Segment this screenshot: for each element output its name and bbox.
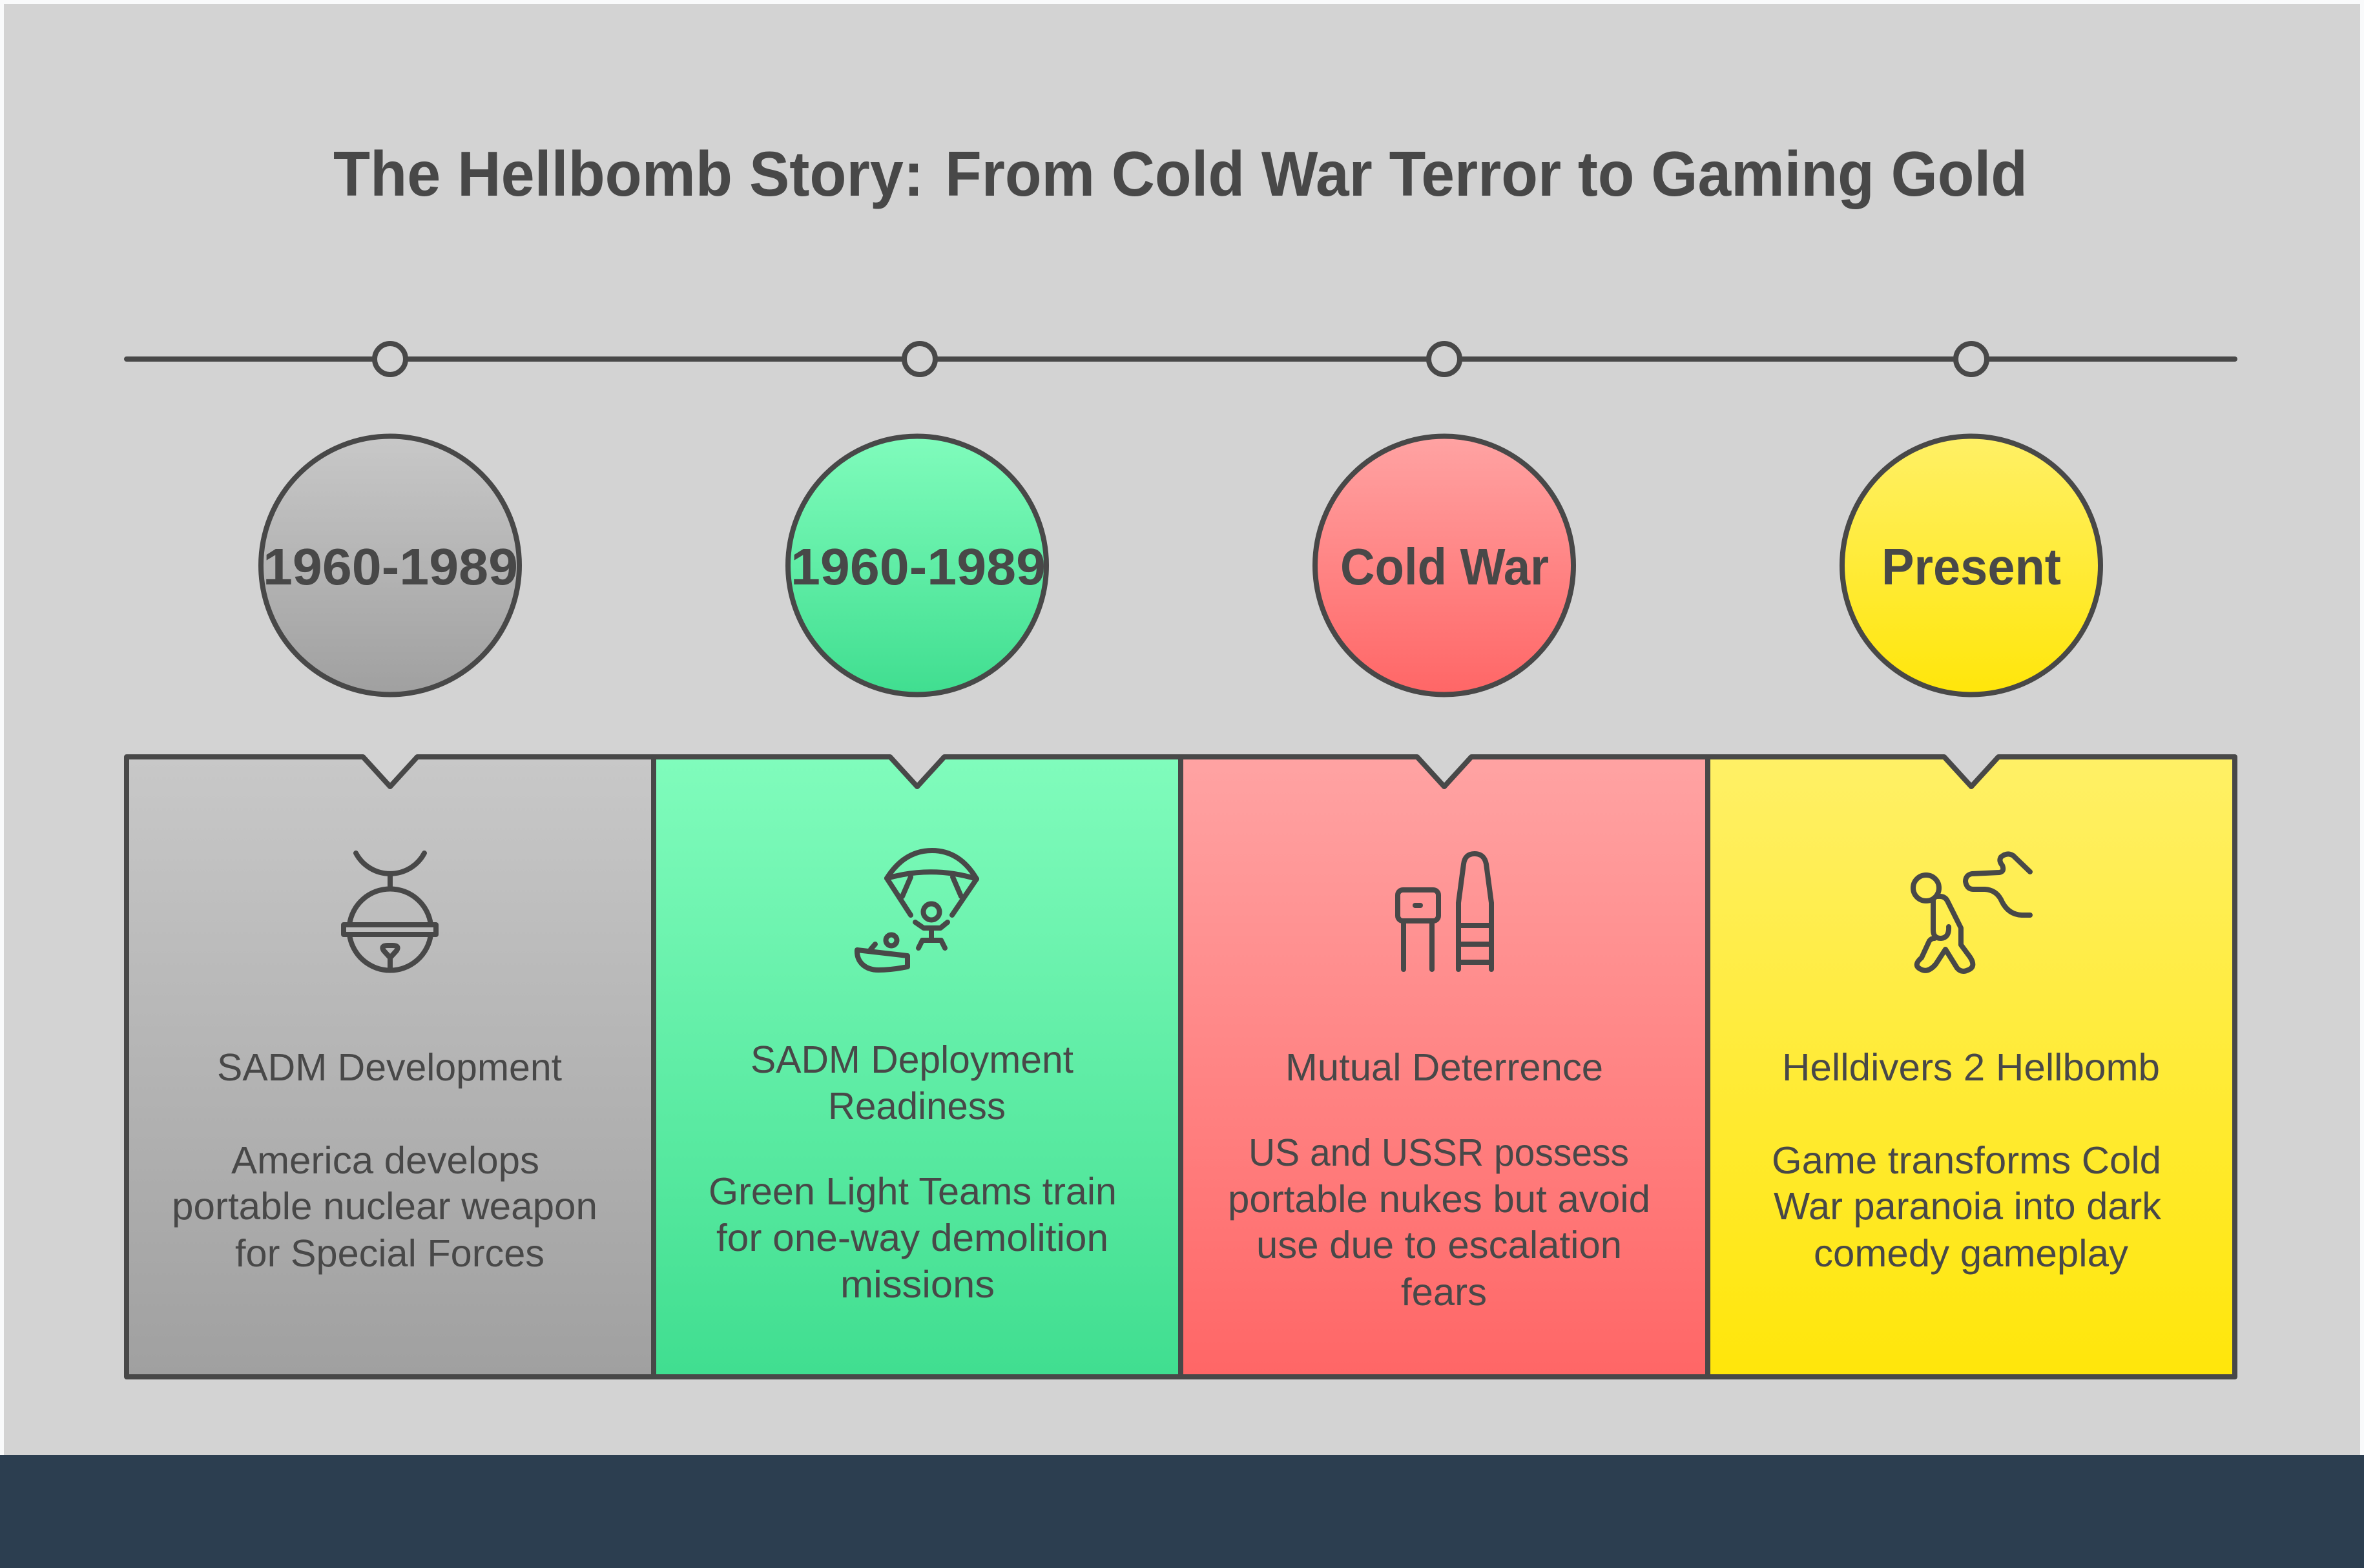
text: SADM Deployment Readiness: for one-way demolition xyxy=(716,1217,1108,1259)
title: From Cold War Terror to Gaming Gold xyxy=(945,138,2027,209)
timeline node 4 xyxy=(1956,344,1987,375)
text: Helldivers 2 Hellbomb: Game transforms Cold xyxy=(1772,1139,2161,1182)
title xyxy=(333,138,2027,209)
text: SADM Deployment Readiness: Green Light Teams train xyxy=(709,1170,1117,1213)
title: The Hellbomb Story: xyxy=(333,138,924,209)
date circle: 1960-1989 (deployment) xyxy=(788,437,1046,695)
date circle: Present xyxy=(1842,437,2100,695)
timeline node 2 xyxy=(904,344,935,375)
text: SADM Development: SADM Development xyxy=(217,1046,562,1089)
date circle: 1960-1989 (deployment): 1960-1989 xyxy=(791,538,1046,595)
date circle: 1960-1989 (development) xyxy=(261,437,519,695)
text: Helldivers 2 Hellbomb: Helldivers 2 Hellbomb xyxy=(1782,1046,2160,1089)
icon: parachutist and boat xyxy=(857,851,977,970)
icon: walking figure and smoke xyxy=(1913,854,2030,971)
timeline node 3 xyxy=(1429,344,1460,375)
footer band xyxy=(0,1455,2364,1568)
icon: bell-shaped bomb xyxy=(344,853,436,971)
text: Helldivers 2 Hellbomb xyxy=(1772,1046,2161,1275)
text: SADM Development: America develops xyxy=(231,1139,539,1182)
text: Mutual Deterrence xyxy=(1228,1046,1650,1314)
text: SADM Development: for Special Forces xyxy=(235,1232,544,1275)
text: SADM Deployment Readiness xyxy=(709,1038,1117,1306)
panel: Helldivers 2 Hellbomb xyxy=(1708,757,2235,1377)
timeline node 1 xyxy=(375,344,406,375)
text: SADM Development xyxy=(172,1046,597,1275)
text: SADM Development: portable nuclear weapon xyxy=(172,1185,597,1228)
text: Helldivers 2 Hellbomb: comedy gameplay xyxy=(1814,1232,2128,1275)
date circle: Cold War xyxy=(1315,437,1573,695)
text: SADM Deployment Readiness: SADM Deployment xyxy=(751,1038,1073,1081)
timeline xyxy=(127,344,2235,375)
text: Mutual Deterrence: Mutual Deterrence xyxy=(1285,1046,1603,1089)
date circle: 1960-1989 (development): 1960-1989 xyxy=(263,538,518,595)
panel: SADM Deployment Readiness xyxy=(654,757,1181,1377)
text: SADM Deployment Readiness: Readiness xyxy=(828,1085,1006,1128)
panel: Mutual Deterrence xyxy=(1181,757,1708,1377)
text: Helldivers 2 Hellbomb: War paranoia into dark xyxy=(1774,1185,2161,1228)
text: SADM Deployment Readiness: missions xyxy=(840,1263,995,1306)
panel: SADM Development xyxy=(127,757,654,1377)
date circle: Cold War: Cold War xyxy=(1340,538,1549,595)
icon: device and missile xyxy=(1398,854,1491,969)
text: Mutual Deterrence: use due to escalation xyxy=(1256,1224,1622,1266)
text: Mutual Deterrence: portable nukes but avoid xyxy=(1228,1178,1650,1221)
date circle: Present: Present xyxy=(1882,538,2061,595)
text: Mutual Deterrence: fears xyxy=(1401,1271,1487,1314)
text: Mutual Deterrence: US and USSR possess xyxy=(1249,1131,1629,1174)
